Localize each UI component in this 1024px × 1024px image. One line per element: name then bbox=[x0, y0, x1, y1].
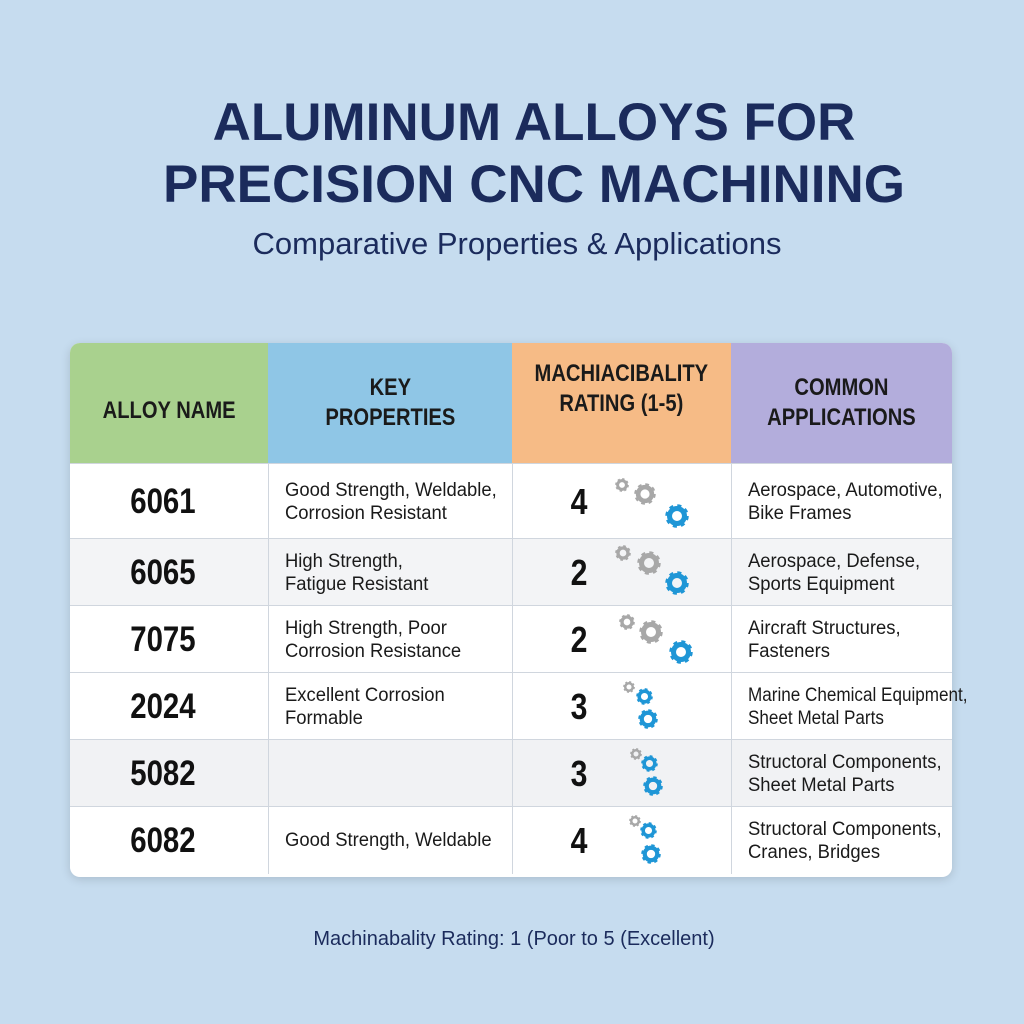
header: key properties: KEY bbox=[369, 374, 411, 401]
row 2024: 2024 bbox=[130, 686, 196, 726]
subtitle: Comparative Properties & Applications bbox=[252, 226, 781, 261]
table bbox=[70, 343, 952, 876]
header: applications: COMMON bbox=[794, 374, 889, 401]
row 2024: Marine Chemical Equipment, bbox=[748, 684, 968, 706]
row 6065: Fatigue Resistant bbox=[285, 574, 428, 594]
header: key properties: PROPERTIES bbox=[325, 404, 455, 431]
row 7075 bbox=[70, 605, 952, 673]
footer note: Machinabality Rating: 1 (Poor to 5 (Excellent) bbox=[313, 928, 715, 950]
row 5082: Structoral Components, bbox=[748, 752, 942, 772]
header: machinability: MACHIACIBALITY bbox=[535, 360, 708, 387]
row 6082: Structoral Components, bbox=[748, 818, 942, 840]
row 7075: 7075 bbox=[130, 620, 196, 658]
row 6082: Cranes, Bridges bbox=[748, 842, 880, 862]
row 6082: 4 bbox=[571, 820, 587, 861]
row 5082 bbox=[70, 739, 952, 807]
header: applications: APPLICATIONS bbox=[767, 404, 916, 431]
row 7075: High Strength, Poor bbox=[285, 618, 447, 638]
row 6065: 2 bbox=[571, 552, 587, 593]
title: PRECISION CNC MACHINING bbox=[163, 155, 905, 214]
row 6061 bbox=[70, 463, 952, 539]
row 6061: 4 bbox=[571, 481, 587, 522]
header: alloy name bbox=[70, 343, 268, 463]
title: ALUMINUM ALLOYS FOR bbox=[213, 93, 855, 152]
row 2024: Excellent Corrosion bbox=[285, 684, 445, 706]
row 6061: 6061 bbox=[130, 482, 196, 520]
header: key properties bbox=[268, 343, 512, 463]
row 6082 bbox=[70, 806, 952, 877]
header: alloy name: ALLOY NAME bbox=[103, 397, 235, 424]
header: machinability: RATING (1-5) bbox=[560, 390, 683, 417]
row 2024 bbox=[70, 672, 952, 740]
row 6061: Aerospace, Automotive, bbox=[748, 480, 943, 500]
row 5082: Sheet Metal Parts bbox=[748, 774, 895, 796]
row 6061: Corrosion Resistant bbox=[285, 502, 447, 524]
row 6061: Good Strength, Weldable, bbox=[285, 480, 497, 500]
header: applications bbox=[731, 343, 952, 463]
row 6082: Good Strength, Weldable bbox=[285, 830, 492, 851]
row 6061: Bike Frames bbox=[748, 502, 851, 524]
row 2024: 3 bbox=[571, 686, 587, 727]
row 7075: Corrosion Resistance bbox=[285, 640, 461, 662]
row 7075: Aircraft Structures, bbox=[748, 618, 901, 638]
header: machinability bbox=[512, 343, 731, 463]
row 5082: 3 bbox=[571, 753, 587, 794]
row 5082: 5082 bbox=[130, 754, 196, 792]
row 7075: 2 bbox=[571, 619, 587, 660]
row 2024: Formable bbox=[285, 708, 363, 728]
title bbox=[163, 93, 905, 214]
row 6065 bbox=[70, 538, 952, 606]
row 6065: Aerospace, Defense, bbox=[748, 550, 920, 572]
row 6065: Sports Equipment bbox=[748, 574, 895, 594]
row 2024: Sheet Metal Parts bbox=[748, 708, 884, 728]
row 7075: Fasteners bbox=[748, 640, 830, 662]
row 6082: 6082 bbox=[130, 820, 196, 860]
row 6065: 6065 bbox=[130, 552, 196, 592]
row 6065: High Strength, bbox=[285, 550, 403, 572]
